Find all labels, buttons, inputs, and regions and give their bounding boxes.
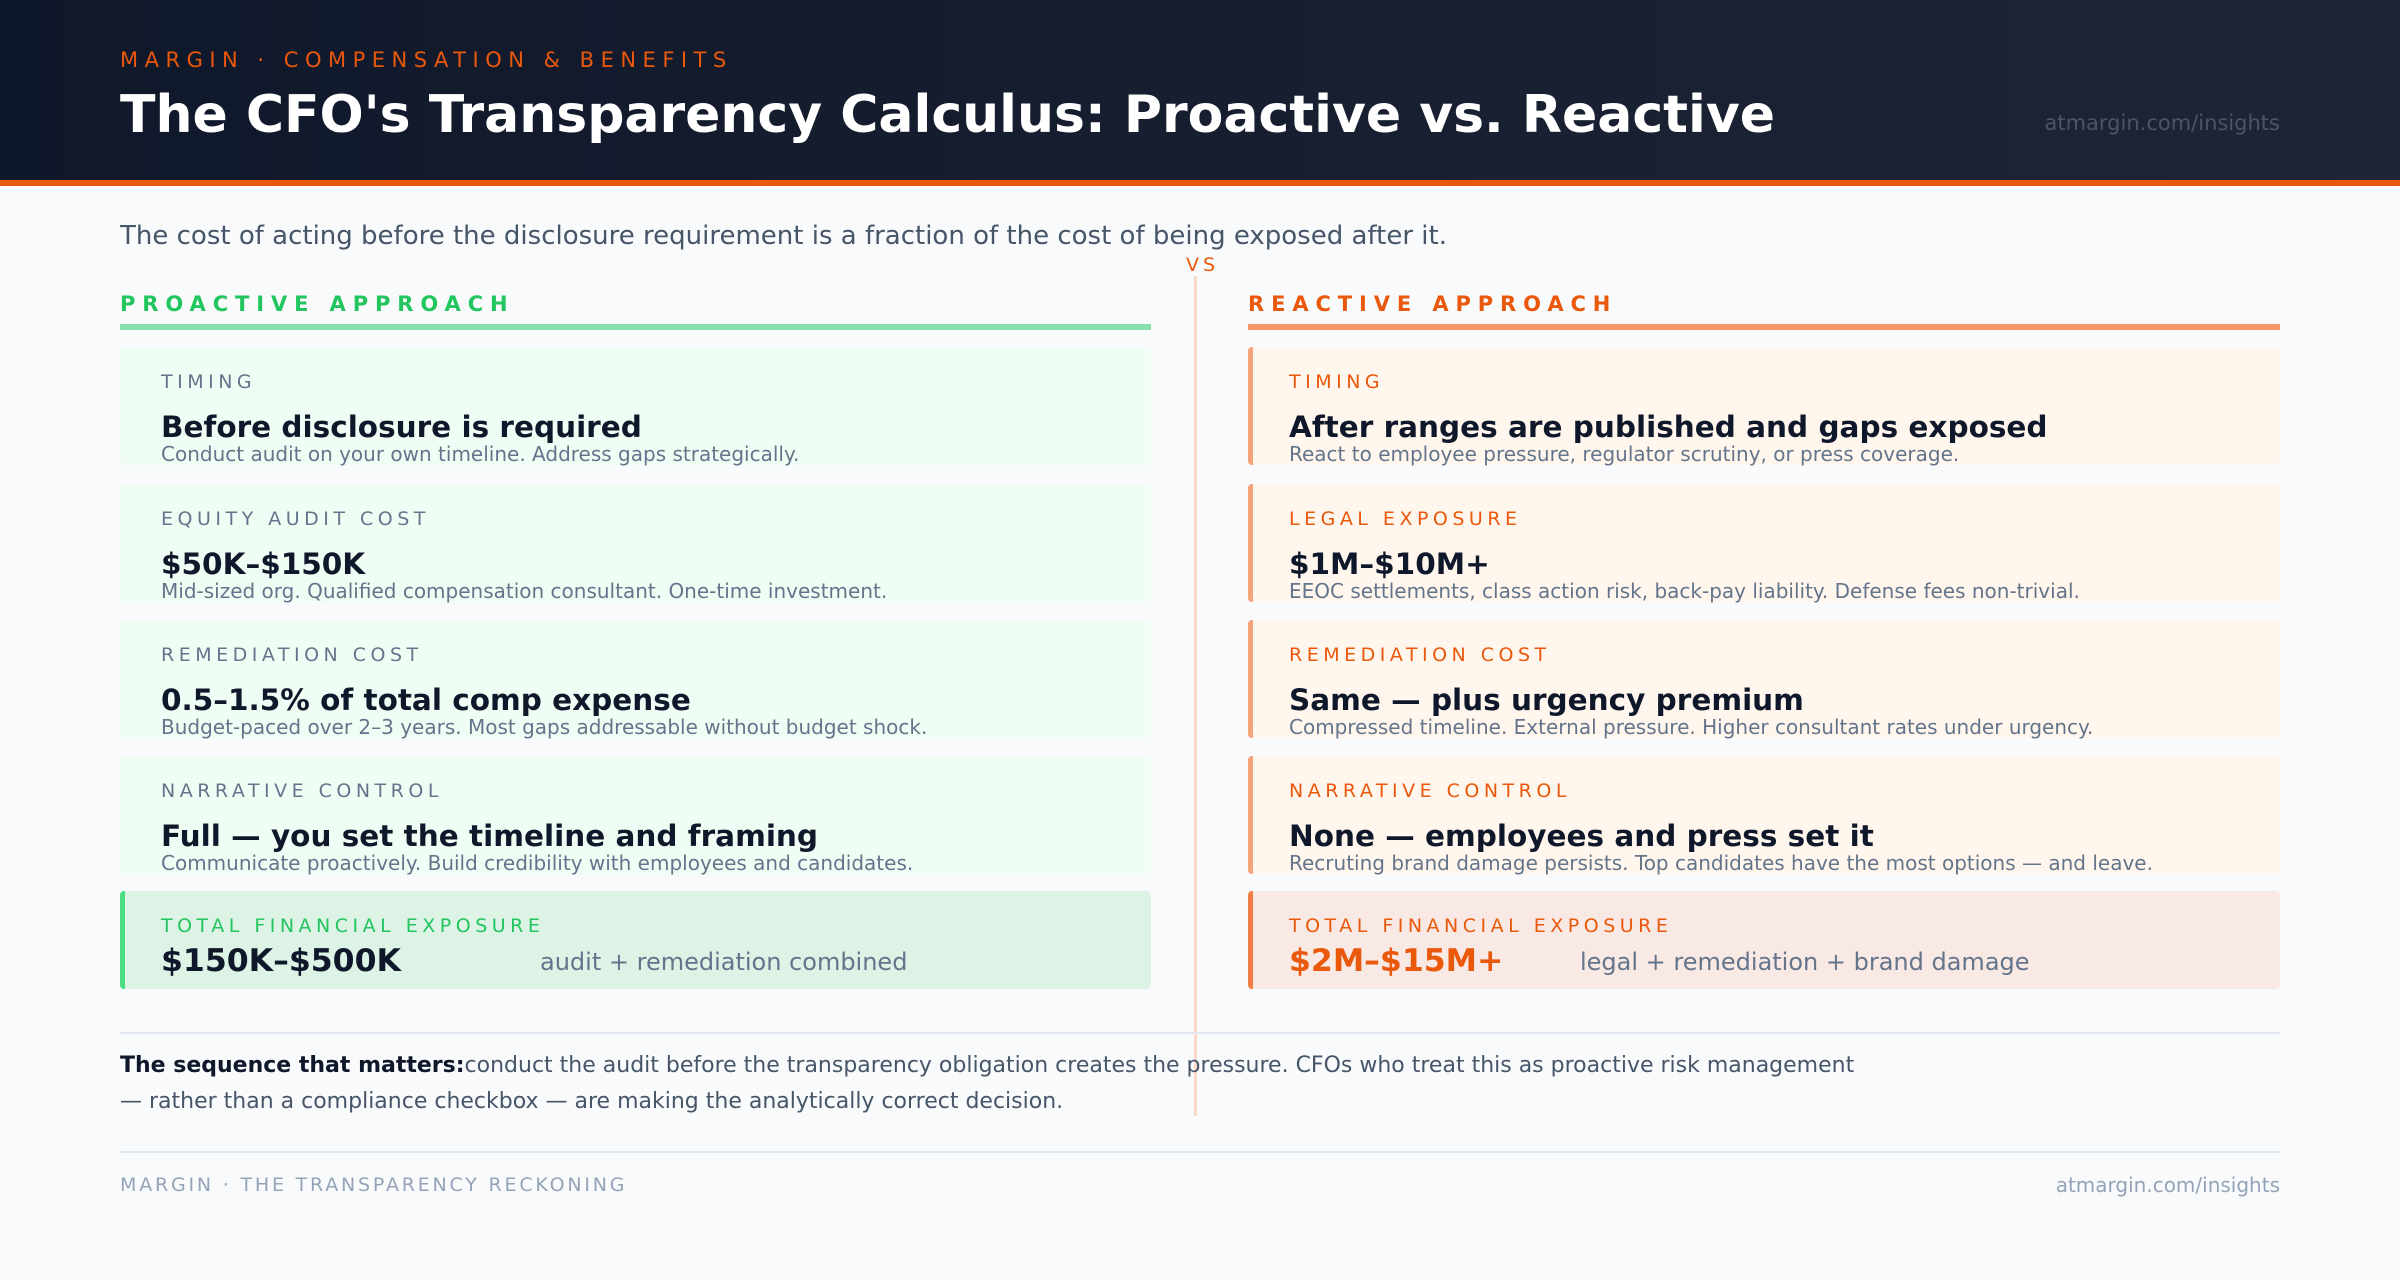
- subtitle: The cost of acting before the disclosure requirement is a fraction of the cost of being exposed after it.: [120, 221, 1447, 251]
- card: reactive remediation: Compressed timeline. External pressure. Higher consultant rates under urgency.: [1289, 715, 2093, 739]
- card: reactive total: [1248, 891, 2280, 989]
- heading: reactive: REACTIVE APPROACH: [1248, 292, 1617, 316]
- card: reactive remediation: REMEDIATION COST: [1289, 644, 1551, 666]
- card: proactive total: TOTAL FINANCIAL EXPOSURE: [161, 915, 544, 937]
- card: reactive total: $2M–$15M+: [1289, 943, 1503, 979]
- header url: atmargin.com/insights: [2044, 111, 2280, 135]
- card: proactive audit cost: [120, 484, 1151, 602]
- card: proactive narrative: Full — you set the timeline and framing: [161, 819, 818, 853]
- card: reactive narrative: [1248, 756, 2280, 874]
- card: proactive audit cost: $50K–$150K: [161, 547, 365, 581]
- card: reactive total: TOTAL FINANCIAL EXPOSURE: [1289, 915, 1672, 937]
- card: reactive legal: LEGAL EXPOSURE: [1289, 508, 1522, 530]
- card: proactive remediation: 0.5–1.5% of total comp expense: [161, 683, 691, 717]
- card: proactive timing: Before disclosure is required: [161, 410, 642, 444]
- footer left: MARGIN · THE TRANSPARENCY RECKONING: [120, 1174, 627, 1196]
- card: proactive remediation: REMEDIATION COST: [161, 644, 423, 666]
- vs label: VS: [1186, 254, 1219, 276]
- card: reactive legal: $1M–$10M+: [1289, 547, 1490, 581]
- card: proactive timing: Conduct audit on your own timeline. Address gaps strategically.: [161, 442, 799, 466]
- card: reactive total: legal + remediation + brand damage: [1580, 948, 2030, 976]
- bottom takeaway text: — rather than a compliance checkbox — are making the analytically correct decision.: [120, 1089, 1063, 1114]
- bottom takeaway text: The sequence that matters:conduct the audit before the transparency obligation creates the pressure. CFOs who treat this as proactive risk management: [120, 1053, 1854, 1078]
- card: reactive narrative: Recruting brand damage persists. Top candidates have the most options — and leave.: [1289, 851, 2153, 875]
- card: proactive narrative: NARRATIVE CONTROL: [161, 780, 443, 802]
- card: proactive remediation: [120, 620, 1151, 738]
- card: proactive timing: [120, 347, 1151, 465]
- card: proactive audit cost: Mid-sized org. Qualified compensation consultant. One-time investment.: [161, 579, 887, 603]
- panel: reactive: [1248, 292, 2280, 330]
- card: proactive timing: TIMING: [161, 371, 256, 393]
- card: reactive legal: EEOC settlements, class action risk, back-pay liability. Defense fees non-trivial.: [1289, 579, 2080, 603]
- panel: proactive: [120, 292, 1151, 330]
- card: reactive remediation: Same — plus urgency premium: [1289, 683, 1804, 717]
- header band: [0, 0, 2400, 180]
- card: proactive narrative: [120, 756, 1151, 874]
- card: reactive timing: TIMING: [1289, 371, 1384, 393]
- card: proactive total: $150K–$500K: [161, 943, 401, 979]
- footer right: atmargin.com/insights: [2056, 1173, 2280, 1197]
- card: proactive total: audit + remediation combined: [540, 948, 907, 976]
- card: reactive timing: [1248, 347, 2280, 465]
- card: reactive narrative: None — employees and press set it: [1289, 819, 1874, 853]
- card: reactive legal: [1248, 484, 2280, 602]
- bottom takeaway text: [120, 1053, 1854, 1114]
- card: proactive narrative: Communicate proactively. Build credibility with employees and candidates.: [161, 851, 913, 875]
- card: proactive audit cost: EQUITY AUDIT COST: [161, 508, 430, 530]
- card: reactive timing: After ranges are published and gaps exposed: [1289, 410, 2048, 444]
- card: reactive remediation: [1248, 620, 2280, 738]
- card: reactive timing: React to employee pressure, regulator scrutiny, or press coverage.: [1289, 442, 1959, 466]
- heading: proactive: PROACTIVE APPROACH: [120, 292, 514, 316]
- card: proactive remediation: Budget-paced over 2–3 years. Most gaps addressable without budget shock.: [161, 715, 927, 739]
- kicker: MARGIN · COMPENSATION & BENEFITS: [120, 48, 733, 72]
- card: proactive total: [120, 891, 1151, 989]
- title: The CFO's Transparency Calculus: Proactive vs. Reactive: [120, 85, 1775, 145]
- card: reactive narrative: NARRATIVE CONTROL: [1289, 780, 1571, 802]
